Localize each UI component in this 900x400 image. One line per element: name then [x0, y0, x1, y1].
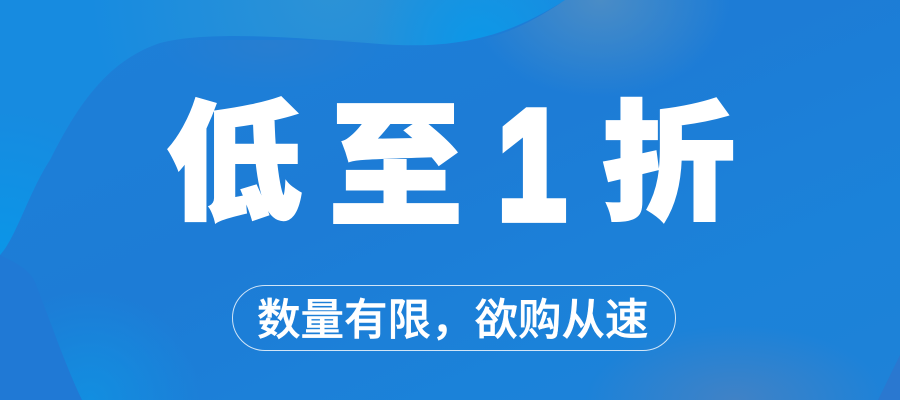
title: 低: [166, 93, 302, 237]
title: 折: [602, 92, 735, 236]
pill subtitle: [232, 286, 676, 350]
pill subtitle: 数量有限，欲购从速: [257, 297, 648, 345]
title: 1: [498, 78, 566, 252]
bottom-left darker wedge: [6, 327, 82, 400]
title: 至: [329, 93, 462, 243]
title: [166, 78, 735, 252]
top light blob: [182, 0, 427, 45]
bottom-right corner wedge: [878, 355, 900, 400]
